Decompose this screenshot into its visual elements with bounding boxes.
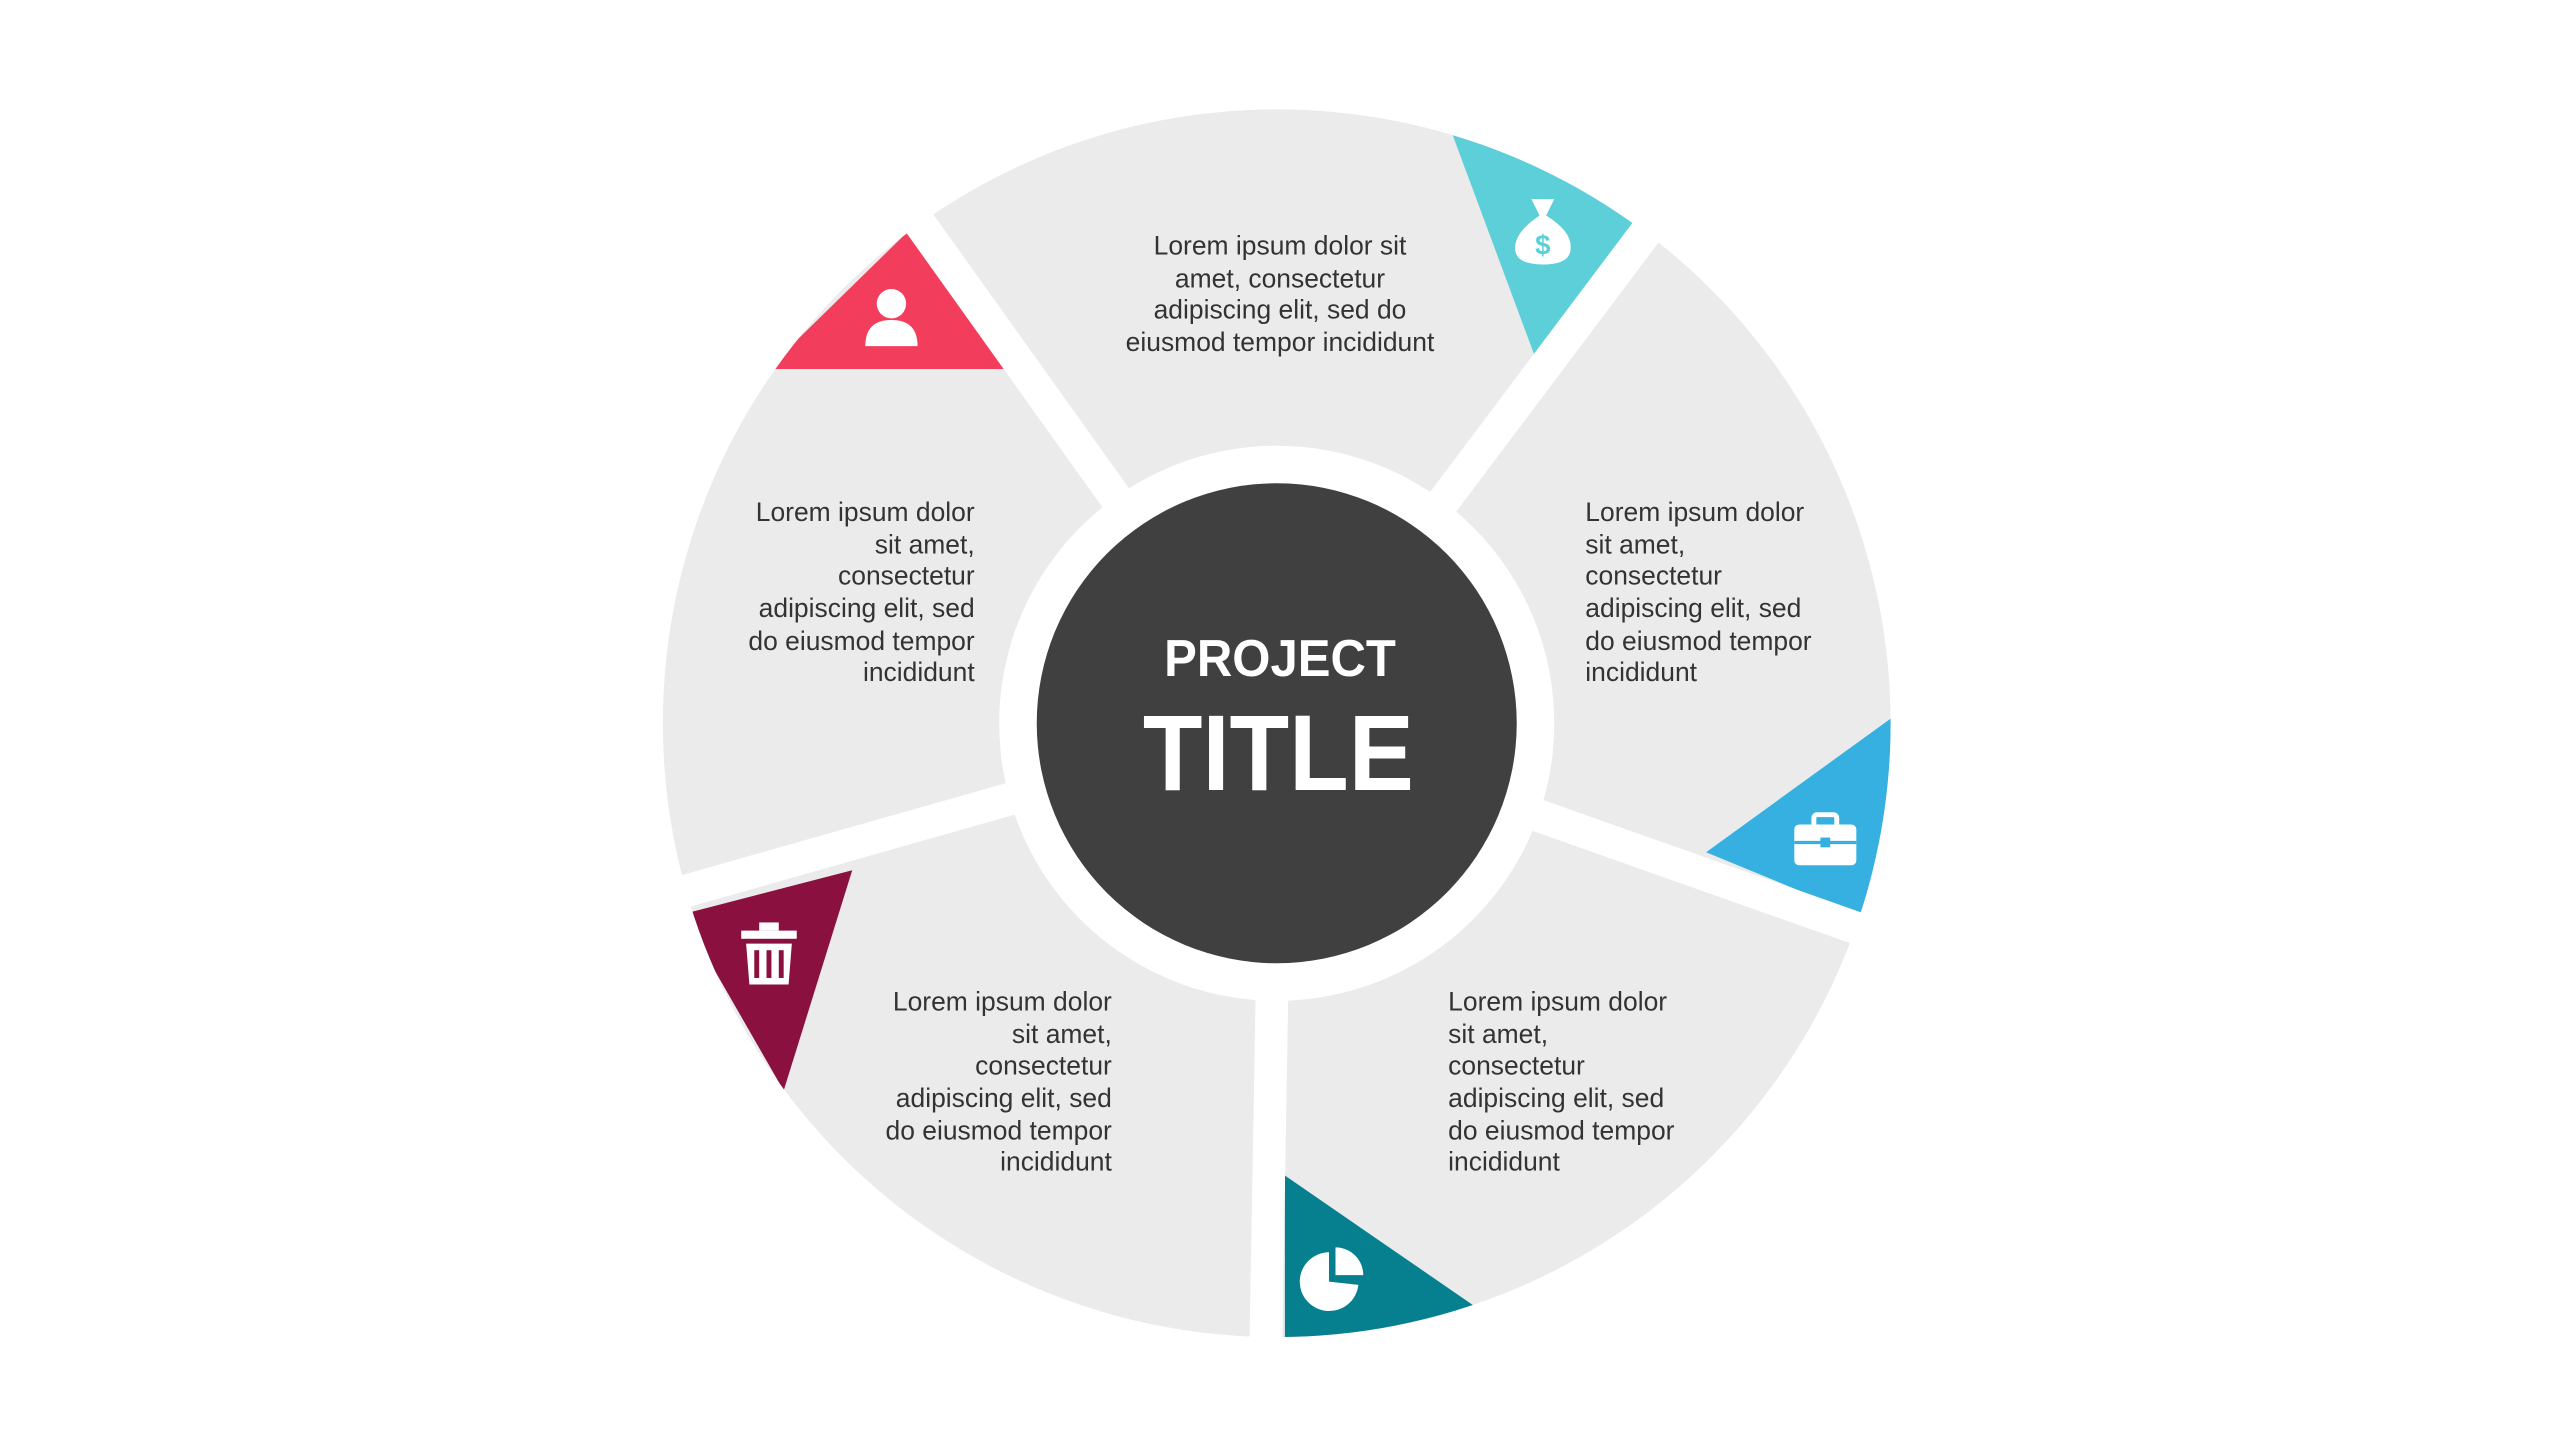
text: top [1126,231,1435,357]
text: lower right [1448,987,1675,1177]
text: lower left: adipiscing elit, sed [896,1083,1112,1113]
text: lower right: incididunt [1448,1147,1561,1177]
text: right: incididunt [1585,657,1698,687]
text: left: sit amet, [875,529,975,559]
text: lower left: do eiusmod tempor [886,1116,1112,1146]
triangle: maroon [682,870,852,1091]
text: right [1585,497,1812,687]
text: right: adipiscing elit, sed [1585,593,1801,623]
triangle: cyan [1452,135,1632,354]
icon: briefcase [1794,815,1856,865]
text: left: do eiusmod tempor [748,626,975,656]
text: lower left: Lorem ipsum dolor [893,987,1112,1017]
center circle: PROJECT [1164,630,1396,688]
text: lower left: incididunt [1000,1147,1112,1177]
text: lower right: do eiusmod tempor [1448,1116,1675,1146]
text: top: eiusmod tempor incididunt [1126,327,1435,357]
ring of segments [661,109,1913,1371]
triangle: teal [1284,1176,1473,1337]
text: right: consectetur [1585,560,1722,590]
center circle [1037,483,1517,963]
text: left: consectetur [838,560,975,590]
icon: pie chart [1300,1247,1363,1311]
text: lower right: sit amet, [1448,1019,1548,1049]
text: lower left: consectetur [975,1050,1112,1080]
icon: trash [741,922,797,984]
text: top: amet, consectetur [1175,263,1385,293]
text: lower left: sit amet, [1012,1019,1112,1049]
triangle: pink [776,234,1004,369]
icon: money bag [1515,199,1571,264]
text: top: adipiscing elit, sed do [1154,294,1406,324]
text: right: do eiusmod tempor [1585,626,1812,656]
text: left [748,497,975,687]
text: lower right: consectetur [1448,1050,1585,1080]
text: left: adipiscing elit, sed [759,593,975,623]
text: lower right: Lorem ipsum dolor [1448,987,1667,1017]
icon: money bag: $ [1535,230,1551,261]
text: right: Lorem ipsum dolor [1585,497,1804,527]
center circle: TITLE [1143,692,1414,813]
cycle diagram [663,110,1891,1337]
text: left: Lorem ipsum dolor [756,497,975,527]
text: left: incididunt [863,657,975,687]
text: right: sit amet, [1585,529,1685,559]
icon: person [865,289,918,346]
text: lower left [886,987,1112,1177]
triangle: blue [1706,718,1891,912]
text: lower right: adipiscing elit, sed [1448,1083,1664,1113]
text: top: Lorem ipsum dolor sit [1154,231,1407,261]
